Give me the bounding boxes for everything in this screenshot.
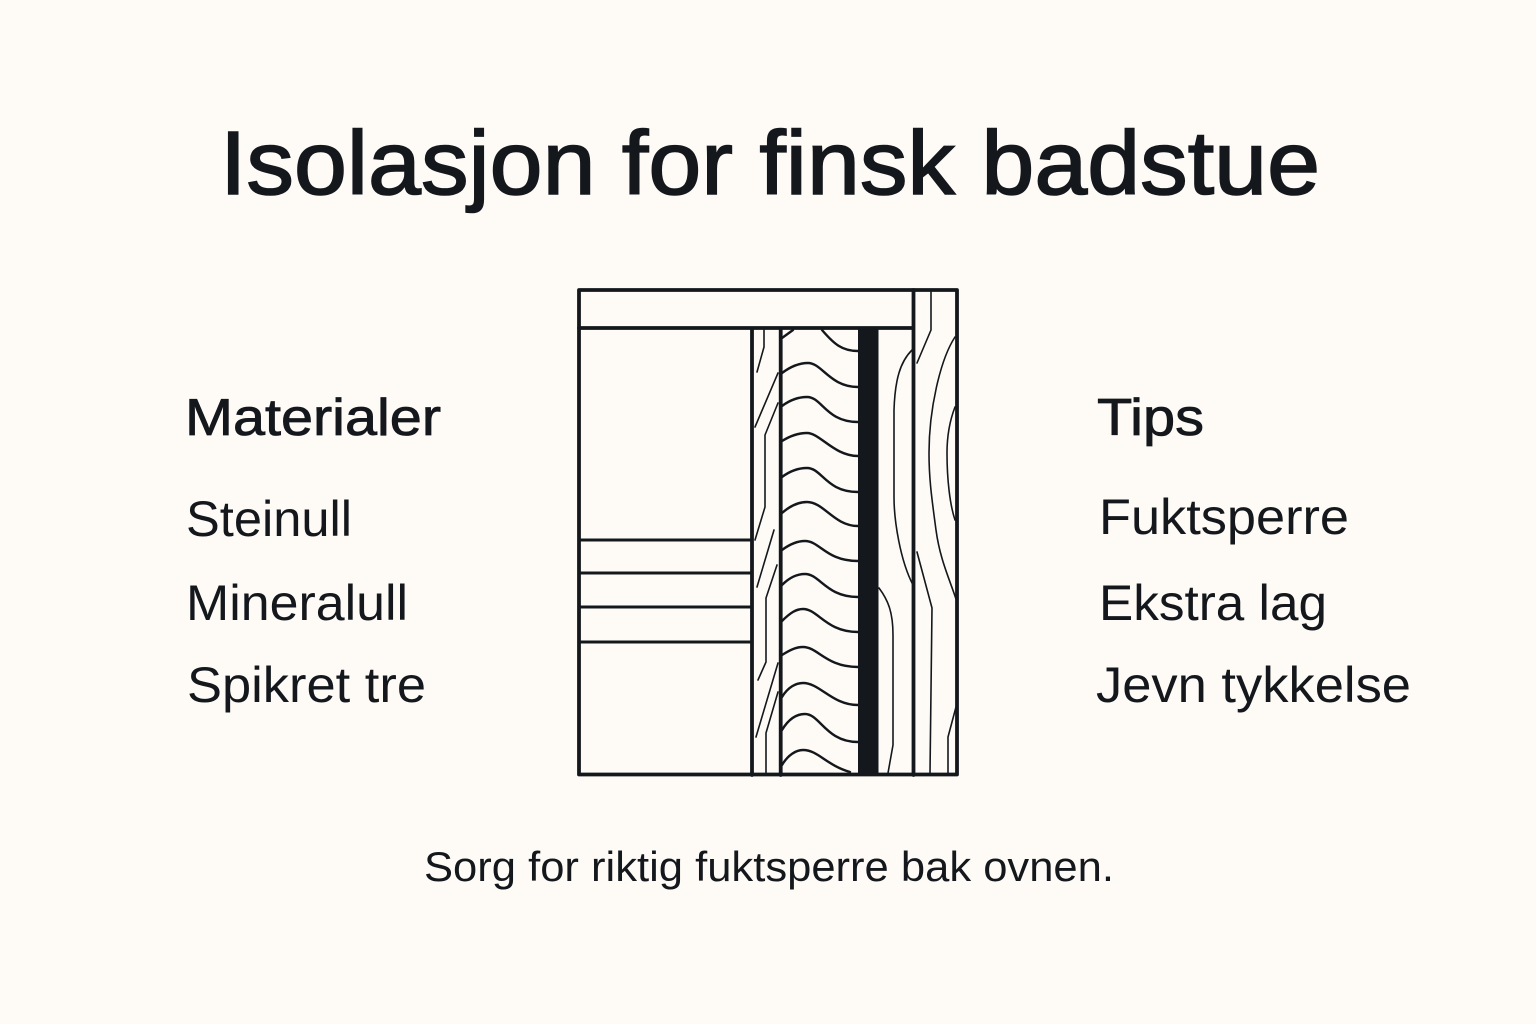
vapour barrier: solid black bar xyxy=(858,328,878,775)
item: Steinull: Steinull xyxy=(186,491,352,547)
title: Isolasjon for finsk badstue xyxy=(220,114,1320,214)
panel: tips list xyxy=(1096,389,1411,713)
item: Spikret tre: Spikret tre xyxy=(187,657,426,713)
wood grain right of barrier xyxy=(879,350,913,773)
panel: materials list xyxy=(185,389,441,713)
item: Ekstra lag: Ekstra lag xyxy=(1099,575,1327,631)
item: Mineralull: Mineralull xyxy=(186,575,408,631)
footer note: Sorg for riktig fuktsperre bak ovnen. xyxy=(424,843,1114,890)
heading: Tips: Tips xyxy=(1097,389,1204,447)
diagram: wall insulation cross-section xyxy=(579,290,957,775)
wood grain strip xyxy=(755,330,778,773)
outer wood grain strip xyxy=(917,291,957,773)
item: Fuktsperre: Fuktsperre xyxy=(1099,489,1349,545)
left panel with horizontal boards xyxy=(580,540,752,642)
wavy insulation layer xyxy=(782,330,858,772)
frame and structural lines xyxy=(579,290,957,775)
item: Jevn tykkelse: Jevn tykkelse xyxy=(1096,657,1411,713)
heading: Materialer: Materialer xyxy=(185,389,441,447)
